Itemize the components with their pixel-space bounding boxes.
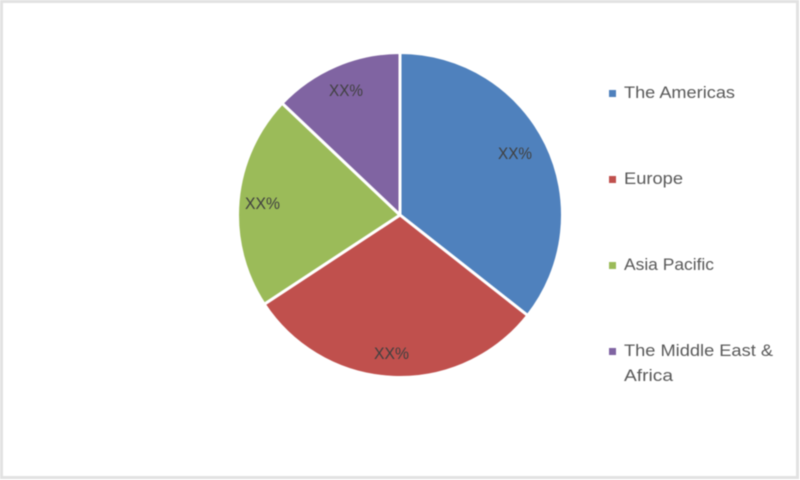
slice: Europe xyxy=(264,215,528,377)
slice: Asia Pacific xyxy=(238,103,400,304)
label: Middle East value: XX% xyxy=(329,81,363,100)
legend item: The Middle East & Africa xyxy=(609,341,774,385)
legend item: The Middle East & Africa: Africa xyxy=(624,366,674,385)
legend item: The Americas: The Americas xyxy=(624,83,735,102)
legend xyxy=(609,83,774,385)
legend item: Asia Pacific: Asia Pacific xyxy=(624,255,715,274)
legend item: Europe: Europe xyxy=(624,169,683,188)
slice: The Middle East & Africa xyxy=(282,52,400,215)
legend item: The Middle East & Africa: The Middle East & xyxy=(624,341,774,360)
pie chart xyxy=(238,52,563,377)
label: Europe value: XX% xyxy=(374,344,409,363)
slice: The Americas xyxy=(400,52,563,316)
label: The Americas value: XX% xyxy=(498,144,532,163)
label: Asia Pacific value: XX% xyxy=(245,194,280,213)
data labels xyxy=(245,81,532,363)
